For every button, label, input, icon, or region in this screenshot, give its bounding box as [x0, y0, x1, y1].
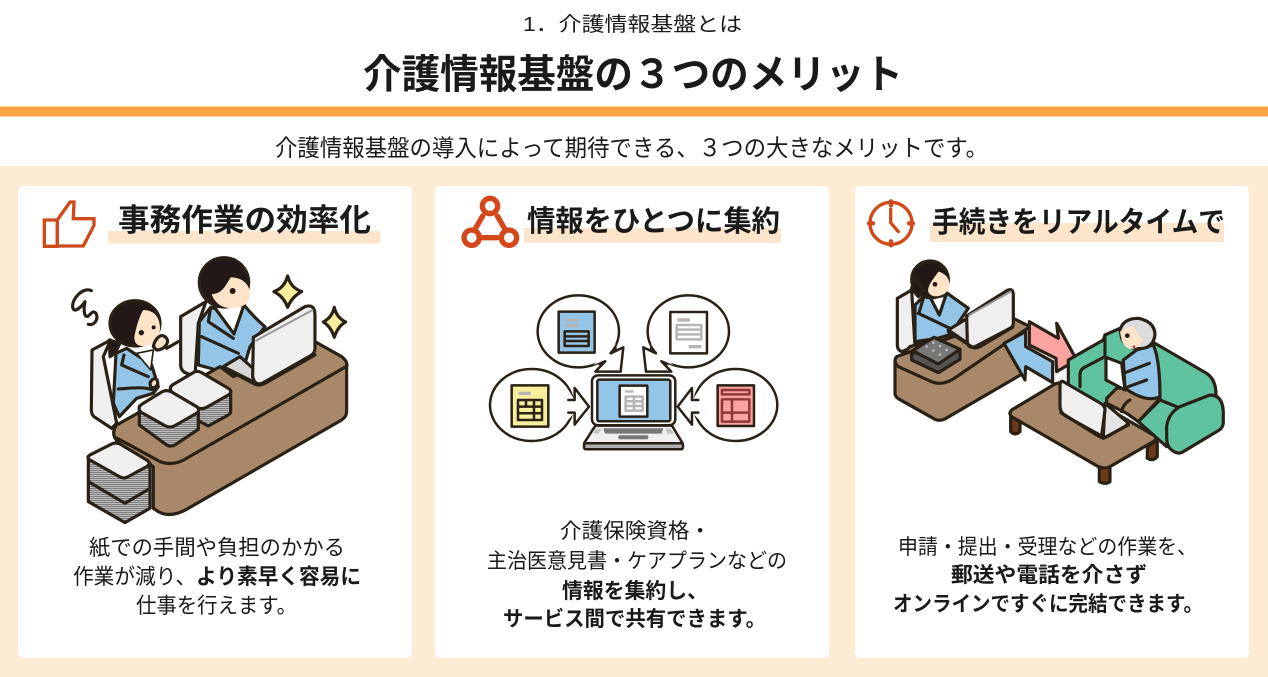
bubble: red document — [677, 369, 777, 441]
body text: 介護保険資格・ — [560, 520, 711, 543]
body text: 情報を集約し、 — [562, 580, 708, 603]
body text: 紙での手間や負担のかかる — [89, 536, 345, 560]
panel: realtime — [855, 186, 1249, 658]
body text: 郵送や電話を介さず — [951, 564, 1147, 587]
panel: consolidate — [435, 186, 829, 658]
icon: clock — [869, 201, 913, 245]
sofa — [1068, 328, 1223, 453]
heading highlight — [524, 228, 781, 243]
subtitle: 介護情報基盤の導入によって期待できる、３つの大きなメリットです。 — [275, 135, 988, 161]
heading highlight — [108, 231, 380, 244]
coffee table — [1010, 383, 1157, 483]
bubble: yellow document — [490, 369, 589, 441]
icon: thumbs up — [44, 202, 94, 246]
body text: 仕事を行えます。 — [136, 594, 297, 618]
chair — [897, 290, 915, 352]
body text — [487, 520, 787, 631]
bubble: white document — [643, 295, 729, 372]
stress squiggle — [73, 290, 97, 325]
icon: nodes — [464, 198, 517, 245]
laptop — [584, 375, 683, 449]
illustration: online procedure — [895, 261, 1223, 483]
arrow: blue — [1004, 332, 1053, 383]
chair back left — [91, 340, 117, 428]
arrow: pink — [1029, 322, 1077, 372]
staff worker — [912, 261, 968, 342]
keyboard — [223, 357, 260, 383]
desk — [114, 342, 347, 514]
section label: 1．介護情報基盤とは — [523, 13, 742, 36]
body text: 申請・提出・受理などの作業を、 — [898, 536, 1197, 559]
body text: オンラインですぐに完結できます。 — [893, 593, 1203, 616]
body text: 主治医意見書・ケアプランなどの — [487, 550, 787, 573]
chair back right — [181, 302, 206, 377]
body text — [893, 536, 1203, 616]
page background — [0, 166, 1268, 677]
heading: 手続きをリアルタイムで — [932, 206, 1225, 239]
reception desk — [895, 317, 1030, 420]
worker right — [198, 258, 265, 370]
illustration: documents into laptop — [490, 295, 777, 449]
heading: 事務作業の効率化 — [118, 203, 371, 238]
worker left — [109, 301, 178, 417]
telephone — [912, 337, 960, 373]
title: 介護情報基盤の３つのメリット — [363, 53, 903, 97]
panel: efficiency — [18, 186, 412, 658]
laptop — [1060, 381, 1128, 438]
sparkles — [274, 276, 302, 307]
monitor — [967, 290, 1013, 347]
keyboard — [948, 317, 970, 345]
heading highlight — [930, 223, 1224, 242]
body text: サービス間で共有できます。 — [503, 608, 766, 631]
paper stacks — [88, 371, 231, 523]
orange rule — [0, 106, 1268, 116]
elderly person — [1106, 318, 1160, 422]
bubble: blue document — [538, 295, 623, 372]
heading: 情報をひとつに集約 — [527, 205, 780, 238]
monitor — [253, 306, 315, 384]
illustration: office workers — [73, 258, 347, 523]
body text: 作業が減り、より素早く容易に — [73, 565, 361, 589]
body text — [73, 536, 361, 618]
